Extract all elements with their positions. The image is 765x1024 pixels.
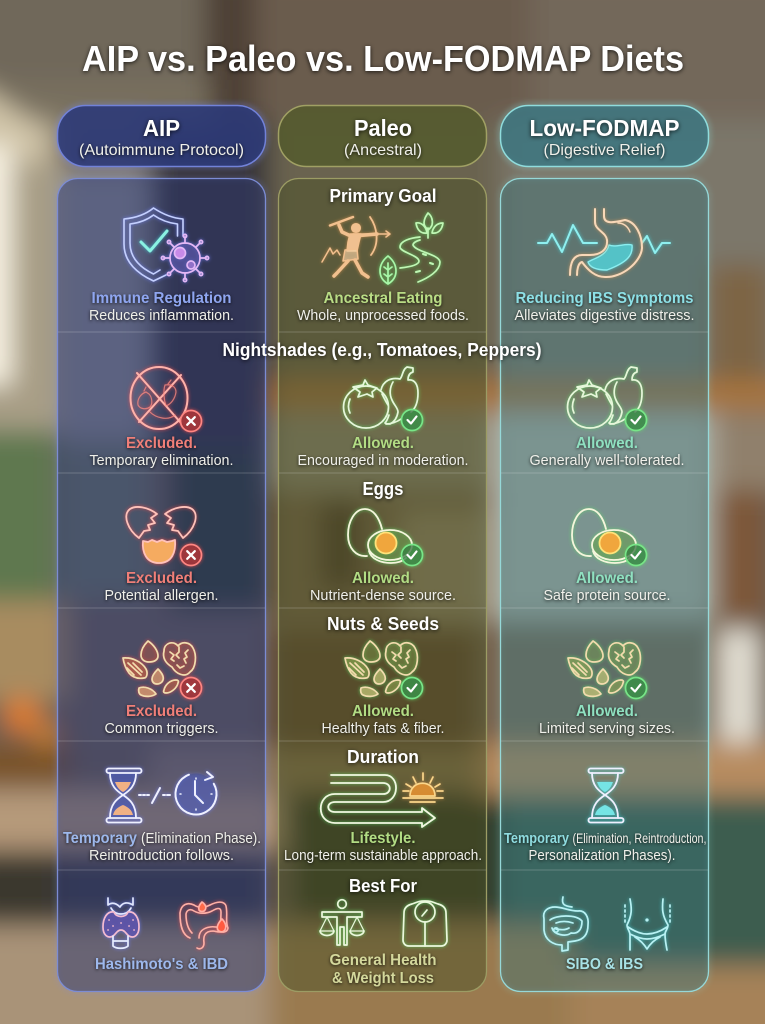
- icon: nuts allowed (Low-FODMAP): [568, 641, 646, 698]
- icon: stomach and pulse: [538, 209, 670, 277]
- text: duration Paleo: Long-term sustainable approach.: [284, 847, 482, 864]
- text: nightshades Paleo: Allowed.: [352, 435, 414, 452]
- text: Reducing IBS Symptoms: Reducing IBS Symptoms: [516, 290, 694, 307]
- text: duration AIP: [63, 830, 261, 864]
- text: General Health: General Health: [330, 952, 436, 969]
- text: eggs AIP: Potential allergen.: [104, 587, 218, 604]
- header pill: Low-FODMAP: Low-FODMAP: [530, 115, 680, 141]
- heading: Primary Goal: Primary Goal: [330, 185, 436, 206]
- text: nightshades Paleo: [298, 435, 468, 469]
- icon: nightshades allowed (Low-FODMAP): [568, 367, 646, 430]
- text: nightshades Paleo: Encouraged in moderation.: [298, 452, 468, 469]
- heading: Nightshades: Nightshades (e.g., Tomatoes, Peppers): [222, 339, 542, 360]
- icon: shield and virus: [124, 208, 209, 282]
- text: eggs Low-FODMAP: [544, 570, 670, 604]
- text: eggs Paleo: Allowed.: [352, 570, 414, 587]
- header pill: AIP: (Autoimmune Protocol): [79, 142, 244, 159]
- text: nightshades AIP: Excluded.: [126, 435, 197, 452]
- text: nuts Low-FODMAP: Allowed.: [576, 703, 638, 720]
- text: nuts Paleo: Allowed.: [352, 703, 414, 720]
- text: General Health: & Weight Loss: [332, 970, 434, 987]
- text: nuts AIP: Excluded.: [126, 703, 197, 720]
- heading: Duration: Duration: [347, 746, 419, 767]
- text: Immune Regulation: [89, 290, 234, 324]
- text: eggs Paleo: Nutrient-dense source.: [310, 587, 456, 604]
- text: nightshades AIP: [90, 435, 234, 469]
- text: duration AIP: (Elimination Phase).: [141, 830, 261, 847]
- icon: nightshades excluded: [130, 367, 202, 432]
- header pill: Paleo: Paleo: [354, 115, 412, 141]
- text: duration Low-FODMAP: [504, 830, 706, 864]
- header pill: Paleo: (Ancestral): [344, 142, 422, 159]
- text: General Health: [330, 952, 436, 987]
- icon: thyroid and colon: [103, 898, 228, 949]
- text: Hashimoto's & IBD: Hashimoto's & IBD: [95, 956, 228, 973]
- text: Immune Regulation: Immune Regulation: [92, 290, 232, 307]
- text: duration Low-FODMAP: Personalization Phases).: [528, 847, 676, 864]
- icon: intestine and waist: [544, 897, 670, 951]
- heading: Best For: Best For: [349, 875, 417, 896]
- text: nightshades Low-FODMAP: Generally well-tolerated.: [530, 452, 684, 469]
- text: Ancestral Eating: Whole, unprocessed foods.: [297, 307, 469, 324]
- icon: nightshades allowed (Paleo): [344, 367, 422, 430]
- icon: lifestyle winding arrow and sun: [321, 773, 443, 827]
- header pill: Low-FODMAP: [500, 105, 709, 167]
- panel: AIP column: [57, 178, 266, 992]
- text: nuts Low-FODMAP: Limited serving sizes.: [539, 720, 675, 737]
- title: AIP vs. Paleo vs. Low-FODMAP Diets: [82, 38, 684, 79]
- header pill: Paleo: [278, 106, 486, 166]
- icon: balance person and scale: [320, 900, 447, 946]
- header pill: Low-FODMAP: (Digestive Relief): [544, 142, 666, 159]
- text: eggs AIP: Excluded.: [126, 570, 197, 587]
- icon: egg allowed (Low-FODMAP): [572, 509, 646, 566]
- text: nuts AIP: Common triggers.: [104, 720, 218, 737]
- icon: hourglass and clock: [106, 766, 224, 822]
- text: duration Low-FODMAP: Temporary: [504, 830, 570, 847]
- panel: Paleo column: [278, 178, 486, 992]
- icon: egg allowed (Paleo): [348, 509, 422, 566]
- text: Reducing IBS Symptoms: [514, 290, 694, 324]
- text: nightshades Low-FODMAP: Allowed.: [576, 435, 638, 452]
- text: Ancestral Eating: Ancestral Eating: [324, 290, 442, 307]
- text: nightshades AIP: Temporary elimination.: [90, 452, 234, 469]
- text: nuts Paleo: [322, 703, 444, 737]
- text: duration Low-FODMAP: (Elimination, Reintroduction,: [572, 830, 706, 846]
- text: Reducing IBS Symptoms: Alleviates digestive distress.: [514, 307, 694, 324]
- icon: broken egg excluded: [126, 507, 202, 566]
- text: eggs Paleo: [310, 570, 456, 604]
- icon: nuts allowed (Paleo): [345, 641, 422, 698]
- text: eggs AIP: [104, 570, 218, 604]
- icon: hourglass teal: [588, 768, 624, 822]
- text: duration AIP: Temporary: [63, 830, 137, 847]
- header pill: AIP: AIP: [143, 115, 180, 141]
- icon: nuts excluded: [123, 641, 202, 698]
- heading: Nuts & Seeds: Nuts & Seeds: [327, 613, 439, 634]
- text: eggs Low-FODMAP: Allowed.: [576, 570, 638, 587]
- text: duration Paleo: [284, 830, 482, 864]
- text: Ancestral Eating: [297, 290, 469, 324]
- text: nuts AIP: [104, 703, 218, 737]
- text: duration AIP: Reintroduction follows.: [89, 847, 234, 864]
- header pill: AIP: [57, 105, 266, 167]
- text: nightshades Low-FODMAP: [530, 435, 684, 469]
- text: SIBO & IBS: SIBO & IBS: [566, 956, 643, 973]
- text: nuts Low-FODMAP: [539, 703, 675, 737]
- text: Immune Regulation: Reduces inflammation.: [89, 307, 234, 324]
- panel: Low-FODMAP column: [500, 178, 709, 992]
- text: nuts Paleo: Healthy fats & fiber.: [322, 720, 444, 737]
- heading: Eggs: Eggs: [362, 478, 404, 499]
- text: eggs Low-FODMAP: Safe protein source.: [544, 587, 670, 604]
- text: duration Paleo: Lifestyle.: [350, 830, 416, 847]
- icon: archer and path: [322, 213, 443, 284]
